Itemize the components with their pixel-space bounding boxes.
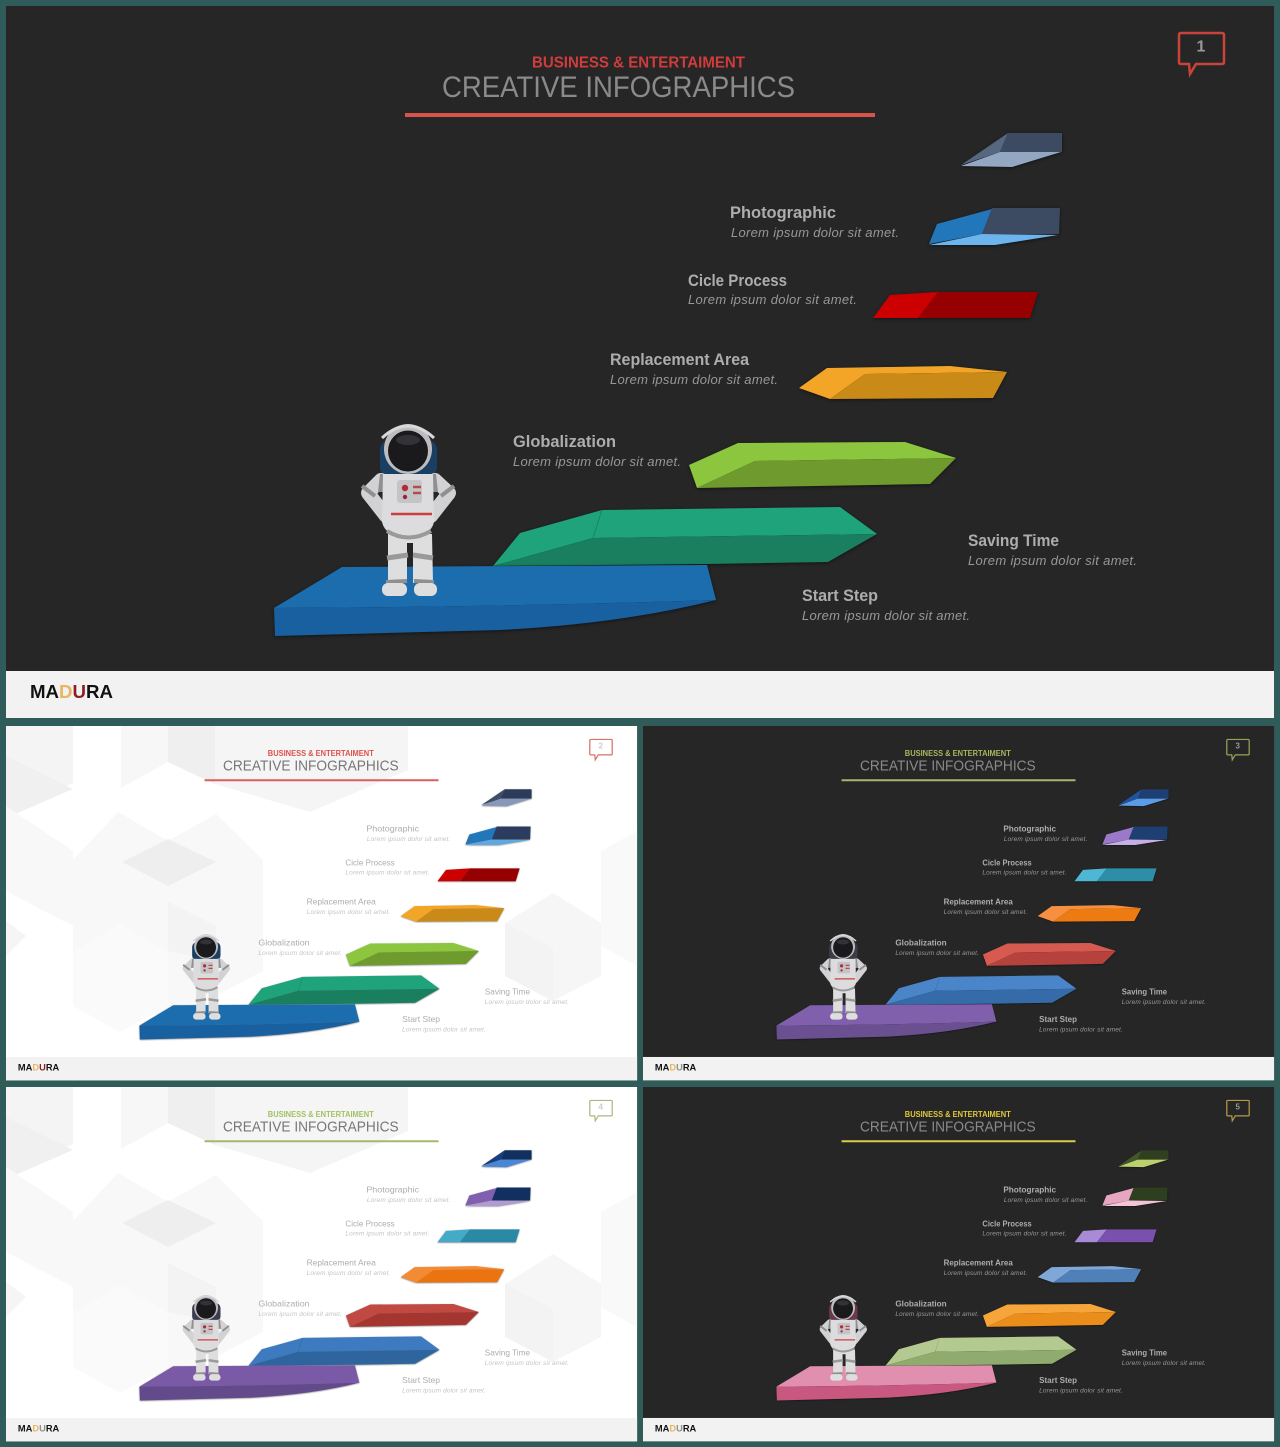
label: saving time	[968, 531, 1137, 568]
label: saving time: Lorem ipsum dolor sit amet.	[1122, 999, 1206, 1006]
icon: astronaut	[820, 1295, 866, 1381]
slide background	[643, 726, 1274, 1057]
slide background	[6, 6, 1274, 671]
step: replacement area	[799, 366, 1007, 399]
label: saving time: Lorem ipsum dolor sit amet.	[1122, 1360, 1206, 1367]
label: globalization: Globalization	[258, 1298, 310, 1308]
icon: speech bubble with page number	[1179, 33, 1224, 74]
step: replacement area	[401, 1266, 504, 1283]
step: replacement area	[401, 905, 504, 922]
hexagon background pattern	[6, 726, 637, 1032]
step: top unlabeled	[1118, 789, 1169, 806]
label: photographic	[366, 824, 450, 843]
label: start step: Lorem ipsum dolor sit amet.	[402, 1027, 486, 1034]
panel: light slide 4	[6, 1087, 637, 1441]
label: start step: Start Step	[402, 1375, 440, 1385]
footer bar	[6, 671, 1274, 718]
title underline	[842, 1140, 1076, 1142]
title: CREATIVE INFOGRAPHICS	[223, 1118, 399, 1135]
label: cicle process	[982, 1218, 1067, 1237]
label: start step: Lorem ipsum dolor sit amet.	[1039, 1027, 1123, 1034]
title: CREATIVE INFOGRAPHICS	[860, 1118, 1036, 1135]
title: CREATIVE INFOGRAPHICS	[223, 757, 399, 774]
logo: MADURA	[655, 1423, 697, 1433]
label: replacement area: Replacement Area	[944, 1258, 1013, 1268]
step: photographic	[465, 1188, 531, 1206]
step: photographic	[1102, 827, 1168, 845]
label: cicle process: Cicle Process	[345, 857, 395, 867]
step: cicle process	[1075, 868, 1157, 881]
label: replacement area: Lorem ipsum dolor sit amet.	[307, 1270, 390, 1277]
label: saving time: Lorem ipsum dolor sit amet.	[485, 999, 569, 1006]
label: photographic: Lorem ipsum dolor sit amet.	[1004, 836, 1087, 843]
icon: speech bubble with page number	[1227, 1100, 1249, 1121]
step: start step	[139, 1365, 359, 1401]
label: start step	[1039, 1014, 1123, 1034]
label: globalization: Lorem ipsum dolor sit amet.	[258, 950, 342, 957]
label: photographic: Lorem ipsum dolor sit amet.	[1004, 1197, 1087, 1204]
label: cicle process: Lorem ipsum dolor sit amet.	[345, 1230, 430, 1237]
step: saving time	[885, 975, 1076, 1005]
label: replacement area	[307, 897, 390, 916]
slide background	[6, 726, 637, 1080]
label: globalization: Lorem ipsum dolor sit amet.	[258, 1311, 342, 1318]
icon: speech bubble with page number	[1227, 739, 1249, 760]
label: cicle process: Cicle Process	[982, 1218, 1032, 1228]
label: saving time: Saving Time	[485, 1348, 530, 1358]
step: globalization	[346, 943, 479, 966]
label: photographic: Photographic	[1003, 1185, 1056, 1195]
label: photographic: Photographic	[1003, 824, 1056, 834]
logo: MADURA	[18, 1423, 60, 1433]
label: cicle process	[688, 271, 857, 307]
step: globalization	[983, 1304, 1116, 1327]
icon: astronaut	[183, 934, 229, 1020]
label: cicle process	[345, 857, 430, 876]
icon: speech bubble with page number: 5	[1236, 1103, 1241, 1112]
label: saving time	[1122, 1348, 1206, 1367]
label: photographic	[1003, 824, 1087, 843]
label: saving time	[485, 1348, 569, 1367]
icon: speech bubble with page number	[590, 739, 612, 760]
label: photographic: Lorem ipsum dolor sit amet.	[367, 1197, 450, 1204]
step: globalization	[689, 442, 956, 488]
icon: astronaut	[820, 934, 866, 1020]
label: globalization: Lorem ipsum dolor sit amet.	[895, 1311, 979, 1318]
footer bar	[643, 1418, 1274, 1441]
label: cicle process: Lorem ipsum dolor sit amet.	[982, 1230, 1067, 1237]
step: top unlabeled	[1118, 1150, 1169, 1167]
step: start step	[274, 565, 716, 636]
label: cicle process: Cicle Process	[688, 271, 787, 290]
subtitle: BUSINESS & ENTERTAIMENT	[905, 1110, 1011, 1119]
label: start step	[402, 1375, 486, 1395]
subtitle: BUSINESS & ENTERTAIMENT	[268, 749, 374, 758]
label: cicle process: Lorem ipsum dolor sit amet.	[345, 869, 430, 876]
logo: MADURA	[30, 682, 113, 702]
panel: dark slide 3	[643, 726, 1274, 1080]
label: photographic: Lorem ipsum dolor sit amet.	[367, 836, 450, 843]
step: photographic	[1102, 1188, 1168, 1206]
label: globalization: Globalization	[895, 1298, 947, 1308]
footer bar	[6, 1057, 637, 1080]
label: cicle process: Lorem ipsum dolor sit amet.	[982, 869, 1067, 876]
step: top unlabeled	[961, 133, 1062, 167]
icon: speech bubble with page number	[590, 1100, 612, 1121]
label: cicle process: Cicle Process	[345, 1218, 395, 1228]
subtitle: BUSINESS & ENTERTAIMENT	[268, 1110, 374, 1119]
label: photographic: Photographic	[730, 203, 836, 222]
subtitle: BUSINESS & ENTERTAIMENT	[532, 54, 745, 72]
step: cicle process	[1075, 1229, 1157, 1242]
label: start step: Lorem ipsum dolor sit amet.	[1039, 1388, 1123, 1395]
label: photographic: Photographic	[366, 824, 419, 834]
label: start step: Start Step	[802, 586, 878, 605]
label: saving time: Saving Time	[1122, 987, 1167, 997]
title underline	[842, 779, 1076, 781]
label: globalization	[895, 1298, 979, 1318]
step: saving time	[248, 975, 439, 1005]
subtitle: BUSINESS & ENTERTAIMENT	[905, 749, 1011, 758]
step: start step	[776, 1365, 996, 1401]
panel: main dark slide 1	[6, 6, 1274, 718]
label: saving time	[485, 987, 569, 1006]
label: photographic	[1003, 1185, 1087, 1204]
label: globalization: Globalization	[258, 937, 310, 947]
label: start step	[802, 586, 970, 623]
label: replacement area	[307, 1258, 390, 1277]
label: saving time: Saving Time	[1122, 1348, 1167, 1358]
step: start step	[776, 1004, 996, 1040]
label: replacement area	[610, 350, 778, 387]
label: globalization	[258, 1298, 342, 1318]
step: top unlabeled	[481, 1150, 532, 1167]
label: replacement area	[944, 897, 1027, 916]
icon: speech bubble with page number: 2	[599, 742, 604, 751]
icon: speech bubble with page number: 4	[599, 1103, 604, 1112]
label: start step: Start Step	[1039, 1375, 1077, 1385]
label: cicle process: Cicle Process	[982, 857, 1032, 867]
label: replacement area: Replacement Area	[307, 1258, 376, 1268]
label: start step: Start Step	[402, 1014, 440, 1024]
label: start step: Lorem ipsum dolor sit amet.	[802, 608, 970, 623]
footer bar	[643, 1057, 1274, 1080]
step: replacement area	[1038, 905, 1141, 922]
title: CREATIVE INFOGRAPHICS	[860, 757, 1036, 774]
step: top unlabeled	[481, 789, 532, 806]
label: photographic: Lorem ipsum dolor sit amet.	[731, 225, 899, 240]
label: start step: Start Step	[1039, 1014, 1077, 1024]
title underline	[205, 779, 439, 781]
label: globalization	[895, 937, 979, 957]
label: replacement area: Lorem ipsum dolor sit amet.	[307, 909, 390, 916]
label: globalization	[258, 937, 342, 957]
label: saving time: Lorem ipsum dolor sit amet.	[485, 1360, 569, 1367]
label: globalization: Globalization	[513, 432, 616, 451]
label: replacement area: Replacement Area	[307, 897, 376, 907]
step: globalization	[983, 943, 1116, 966]
slide background	[6, 1087, 637, 1441]
panel: dark slide 5	[643, 1087, 1274, 1441]
step: globalization	[346, 1304, 479, 1327]
label: saving time: Saving Time	[485, 987, 530, 997]
label: replacement area: Lorem ipsum dolor sit amet.	[610, 372, 778, 387]
step: photographic	[465, 827, 531, 845]
label: globalization: Lorem ipsum dolor sit amet.	[513, 454, 681, 469]
label: photographic	[730, 203, 899, 240]
panel: light slide 2	[6, 726, 637, 1080]
label: replacement area	[944, 1258, 1027, 1277]
label: saving time: Saving Time	[968, 531, 1059, 550]
title: CREATIVE INFOGRAPHICS	[442, 71, 795, 104]
label: cicle process	[982, 857, 1067, 876]
label: replacement area: Lorem ipsum dolor sit amet.	[944, 1270, 1027, 1277]
step: cicle process	[873, 292, 1038, 318]
step: replacement area	[1038, 1266, 1141, 1283]
label: saving time: Lorem ipsum dolor sit amet.	[968, 553, 1137, 568]
label: start step: Lorem ipsum dolor sit amet.	[402, 1388, 486, 1395]
step: cicle process	[438, 1229, 520, 1242]
hexagon background pattern	[6, 1087, 637, 1393]
step: cicle process	[438, 868, 520, 881]
label: saving time	[1122, 987, 1206, 1006]
label: start step	[1039, 1375, 1123, 1395]
label: replacement area: Replacement Area	[944, 897, 1013, 907]
icon: astronaut	[362, 424, 454, 596]
label: replacement area: Lorem ipsum dolor sit amet.	[944, 909, 1027, 916]
step: saving time	[248, 1336, 439, 1366]
label: globalization: Lorem ipsum dolor sit amet.	[895, 950, 979, 957]
title underline	[405, 113, 875, 117]
icon: speech bubble with page number: 3	[1236, 742, 1241, 751]
logo: MADURA	[655, 1062, 697, 1072]
footer bar	[6, 1418, 637, 1441]
logo: MADURA	[18, 1062, 60, 1072]
step: saving time	[493, 507, 877, 566]
label: cicle process: Lorem ipsum dolor sit amet.	[688, 292, 857, 307]
label: globalization: Globalization	[895, 937, 947, 947]
slide background	[643, 1087, 1274, 1418]
label: start step	[402, 1014, 486, 1034]
label: globalization	[513, 432, 681, 469]
icon: astronaut	[183, 1295, 229, 1381]
icon: speech bubble with page number: 1	[1197, 38, 1206, 56]
step: saving time	[885, 1336, 1076, 1366]
step: start step	[139, 1004, 359, 1040]
label: photographic: Photographic	[366, 1185, 419, 1195]
label: replacement area: Replacement Area	[610, 350, 750, 369]
title underline	[205, 1140, 439, 1142]
label: photographic	[366, 1185, 450, 1204]
step: photographic	[929, 208, 1060, 245]
label: cicle process	[345, 1218, 430, 1237]
